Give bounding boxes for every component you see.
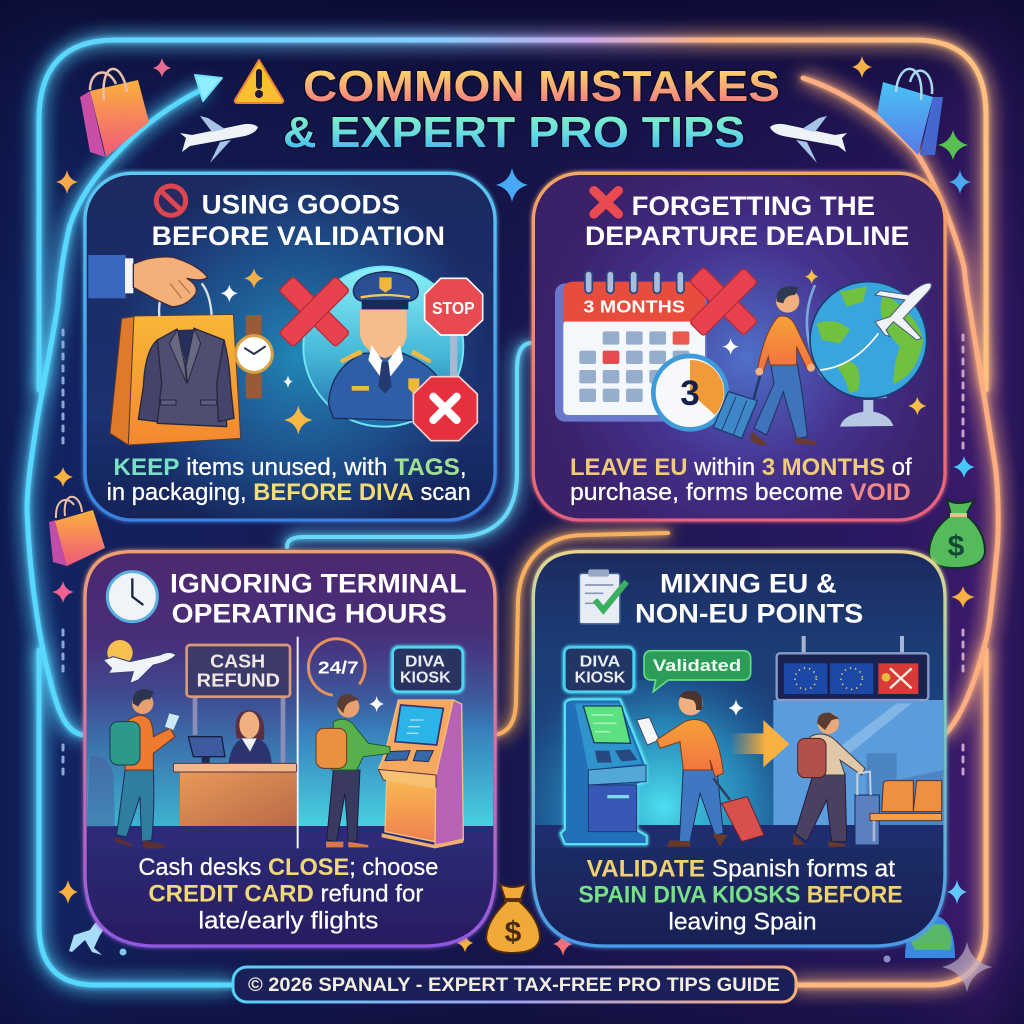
sign: cash refund (187, 645, 290, 763)
decoration: plane right (770, 116, 847, 163)
decoration: shopping bag left (49, 497, 105, 566)
illustration: traveller with form (637, 691, 764, 847)
illustration: traveller with phone (110, 689, 179, 848)
decoration: sparkles (52, 56, 975, 956)
icon: 24/7 gauge (308, 639, 365, 695)
sign: eu flags board (777, 636, 928, 700)
decoration: money bag right (929, 500, 985, 568)
decoration: corner sparkle (942, 942, 992, 992)
footer pill (233, 967, 796, 1002)
panel 2 heading (585, 191, 909, 251)
decoration: plane bottom-left (69, 917, 126, 956)
icon: stop sign: STOP (432, 298, 475, 318)
panel 3 heading: OPERATING HOURS (172, 599, 447, 629)
illustration: refund desk (173, 763, 297, 826)
icon: stop sign (425, 278, 483, 378)
panel: mixing eu and non-eu points (533, 552, 945, 946)
icon: red cross (689, 267, 758, 336)
panel 4 scene (535, 680, 945, 848)
illustration: waiting seats (870, 781, 942, 841)
illustration: officer circle (303, 267, 463, 427)
panel: forgetting the departure deadline (533, 173, 945, 520)
sparkles (722, 269, 927, 415)
icon: clock (107, 572, 157, 622)
decoration: dotted dashes (63, 330, 963, 775)
panel 4 body text: leaving Spain (668, 908, 817, 935)
illustration: calendar: 3 MONTHS (583, 297, 685, 317)
icon: three-month clock (653, 356, 727, 429)
panel 3 body text: Cash desks CLOSE; choose (138, 854, 438, 881)
illustration: hand holding bag (88, 255, 241, 445)
panel 2 body text: LEAVE EU within 3 MONTHS of (570, 454, 912, 481)
panel 3 scene (87, 637, 494, 849)
title line 1: COMMON MISTAKES (303, 62, 780, 111)
icon: red octagon cross (413, 377, 477, 441)
icon: three-month clock: 3 (680, 374, 700, 413)
icon: red cross (279, 276, 350, 347)
callout: validated (644, 651, 751, 692)
panel 1 glow (87, 175, 493, 518)
panel 4 background (533, 552, 945, 946)
sign: diva kiosk: KIOSK (575, 670, 626, 687)
icon: orange arrow (730, 720, 789, 767)
panel 3 heading: IGNORING TERMINAL (170, 569, 467, 599)
panel 3 body text: late/early flights (198, 907, 378, 934)
icon: sun and plane (103, 640, 176, 683)
callout: validated: Validated (653, 656, 741, 675)
decoration: globe bottom-right (884, 917, 955, 962)
panel 4 heading (579, 569, 863, 629)
panel 4 body text: SPAIN DIVA KIOSKS BEFORE (578, 882, 903, 909)
panel 2 body text (570, 454, 912, 506)
panel 4 heading: MIXING EU & (660, 569, 837, 599)
panel 1 body text (107, 454, 471, 506)
illustration: suitcase (713, 374, 761, 438)
footer text: © 2026 SPANALY - EXPERT TAX-FREE PRO TIPS GUIDE (248, 975, 780, 996)
illustration: watch (236, 315, 272, 398)
sign: diva kiosk (564, 647, 634, 692)
illustration: refund clerk (188, 710, 272, 763)
illustration: traveller departing (793, 713, 879, 847)
decoration: money bag right: $ (948, 530, 965, 563)
decoration: shopping bag top-right (877, 69, 943, 155)
sparkles (221, 268, 313, 435)
panel 1 body text: in packaging, BEFORE DIVA scan (107, 479, 471, 506)
illustration: green kiosk (561, 699, 647, 844)
icon: 24/7 gauge: 24/7 (318, 657, 359, 677)
illustration: traveller at kiosk (316, 694, 390, 847)
panel 1 heading: BEFORE VALIDATION (152, 221, 445, 251)
panel 1 heading: USING GOODS (202, 189, 400, 219)
panel 4 heading: NON-EU POINTS (635, 599, 863, 629)
sign: diva kiosk (393, 647, 463, 692)
panel 3 heading (107, 569, 467, 629)
sparkle (369, 696, 384, 712)
decoration: money bag bottom (486, 884, 540, 953)
panel 4 body text: VALIDATE Spanish forms at (587, 856, 895, 883)
icon: clipboard with tick (579, 569, 627, 624)
sign: diva kiosk: DIVA (580, 654, 621, 671)
illustration: kiosk (378, 700, 463, 848)
panel 2 heading: FORGETTING THE (632, 191, 875, 221)
decoration: money bag bottom: $ (505, 916, 522, 949)
panel 4 body text (578, 856, 903, 935)
panel 2 heading: DEPARTURE DEADLINE (585, 221, 909, 251)
panel 3 body text: CREDIT CARD refund for (148, 881, 423, 908)
panel: ignoring terminal operating hours (85, 552, 495, 946)
icon: prohibited (156, 186, 186, 215)
illustration: globe and plane (807, 282, 931, 427)
decoration: plane left (180, 116, 258, 163)
panel 3 body text (138, 854, 438, 934)
title line 2: & EXPERT PRO TIPS (283, 108, 745, 157)
panel 2 body text: purchase, forms become VOID (570, 479, 911, 506)
panel 1 background (85, 173, 495, 520)
illustration: calendar (555, 271, 707, 422)
divider (297, 637, 299, 848)
illustration: traveller (750, 286, 817, 445)
sign: cash refund: REFUND (197, 670, 280, 691)
illustration: customs officer (328, 272, 441, 421)
sparkle (729, 699, 743, 716)
sign: diva kiosk: KIOSK (400, 670, 451, 687)
panel 1 heading (152, 186, 445, 251)
decoration: shopping bag top-left (80, 69, 149, 157)
panel 1 body text: KEEP items unused, with TAGS, (113, 454, 467, 481)
icon: warning triangle (235, 60, 283, 103)
panel 3 background (85, 552, 495, 946)
illustration: jacket (138, 328, 234, 427)
panel 2 background (533, 173, 945, 520)
panel: using goods before validation (85, 173, 495, 520)
title (235, 60, 780, 157)
sign: diva kiosk: DIVA (405, 654, 445, 671)
sign: cash refund: CASH (210, 650, 265, 671)
icon: red x small (594, 191, 618, 214)
arrowhead on blue line (195, 75, 222, 101)
